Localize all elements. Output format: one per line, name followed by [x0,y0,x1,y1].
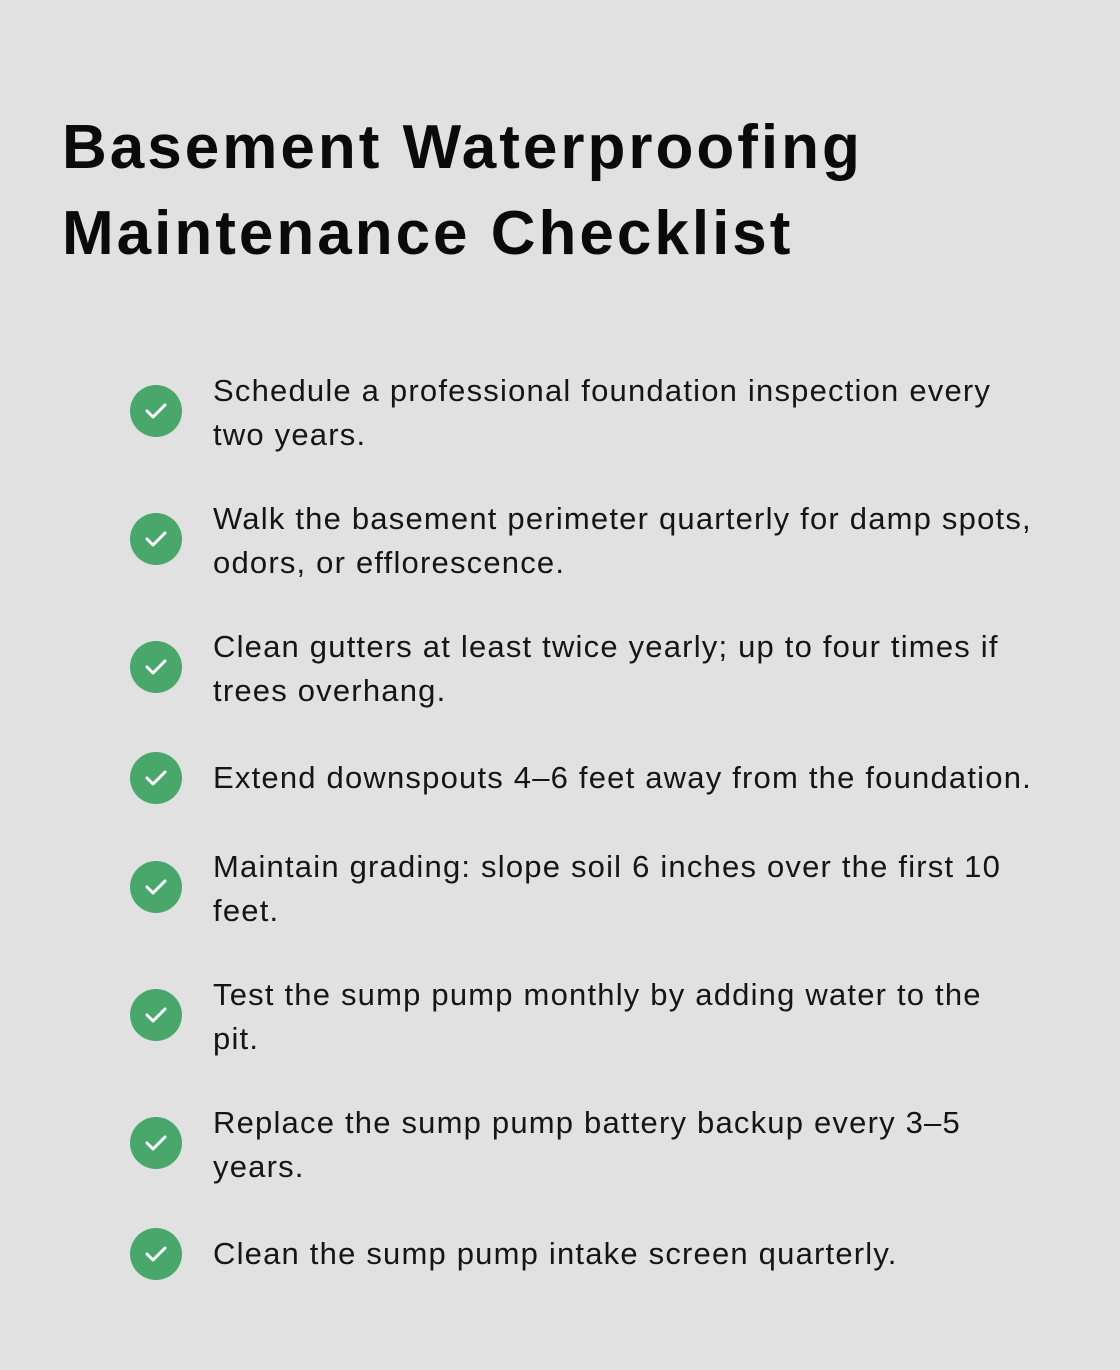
item 5: Maintain grading: slope soil 6 inches over the first 10 [213,849,1001,884]
item 2: odors, or efflorescence. [213,545,565,580]
item 1 [130,373,991,452]
title [62,113,863,268]
item 7: Replace the sump pump battery backup every 3–5 [213,1105,961,1140]
item 5: feet. [213,893,279,928]
item 8 [130,1228,898,1280]
item 7: years. [213,1149,305,1184]
item 3: trees overhang. [213,673,446,708]
item 6: pit. [213,1021,259,1056]
title: Basement Waterproofing [62,113,863,182]
item 6: Test the sump pump monthly by adding water to the [213,977,982,1012]
item 4 [130,752,1032,804]
checklist [130,373,1032,1280]
title: Maintenance Checklist [62,199,793,268]
item 4: Extend downspouts 4–6 feet away from the foundation. [213,760,1032,795]
item 5 [130,849,1001,928]
item 6 [130,977,982,1056]
item 3 [130,629,999,708]
item 2 [130,501,1032,580]
item 2: Walk the basement perimeter quarterly for damp spots, [213,501,1032,536]
item 7 [130,1105,961,1184]
item 3: Clean gutters at least twice yearly; up to four times if [213,629,999,664]
item 1: two years. [213,417,366,452]
item 1: Schedule a professional foundation inspection every [213,373,991,408]
item 8: Clean the sump pump intake screen quarterly. [213,1236,898,1271]
